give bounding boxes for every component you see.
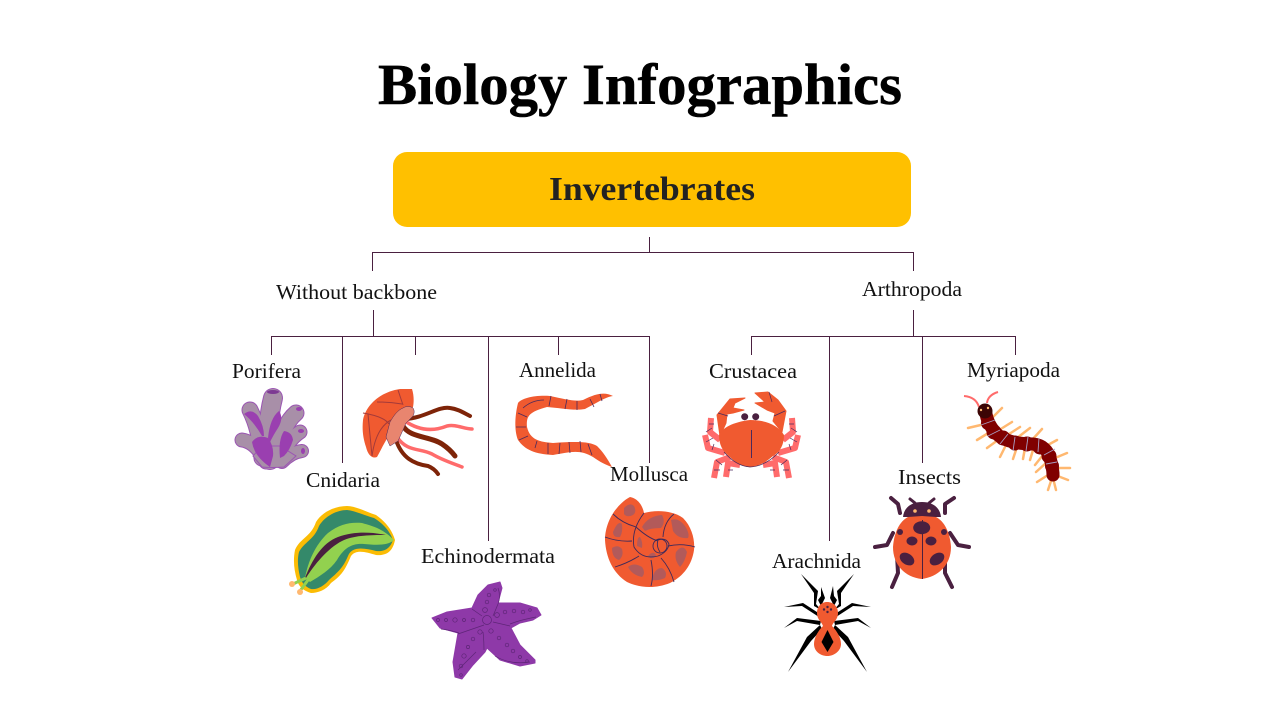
label: Annelida: Annelida [519,358,597,382]
icon: nautilus shell (Mollusca) [605,497,695,587]
icon: jellyfish (Cnidaria) [363,389,472,474]
icon: centipede (Myriapoda) [964,392,1070,490]
label: Mollusca: Mollusca [610,462,689,486]
icon: starfish (Echinodermata) [432,582,541,679]
label: Cnidaria: Cnidaria [306,468,381,492]
label: Crustacea: Crustacea [709,359,798,383]
label: Porifera: Porifera [232,359,302,383]
label: Echinodermata: Echinodermata [421,544,556,568]
label: Arthropoda: Arthropoda [862,277,963,301]
icon: worm (Annelida) [515,394,613,467]
icon: crab (Crustacea) [705,392,798,478]
icon: coral (Porifera) [242,390,305,468]
title: Biology Infographics [378,52,902,117]
icon: ladybug (Insects) [875,498,969,587]
label: Without backbone: Without backbone [276,280,437,304]
root box: Invertebrates [393,152,911,227]
label: Myriapoda: Myriapoda [967,358,1061,382]
tree connector lines [272,237,1016,541]
icon: spider (Arachnida) [784,574,871,672]
label: Insects: Insects [898,465,961,489]
root box: Invertebrates: Invertebrates [549,171,755,208]
icon: sea slug (Cnidaria) [289,506,395,595]
label: Arachnida: Arachnida [772,549,862,573]
